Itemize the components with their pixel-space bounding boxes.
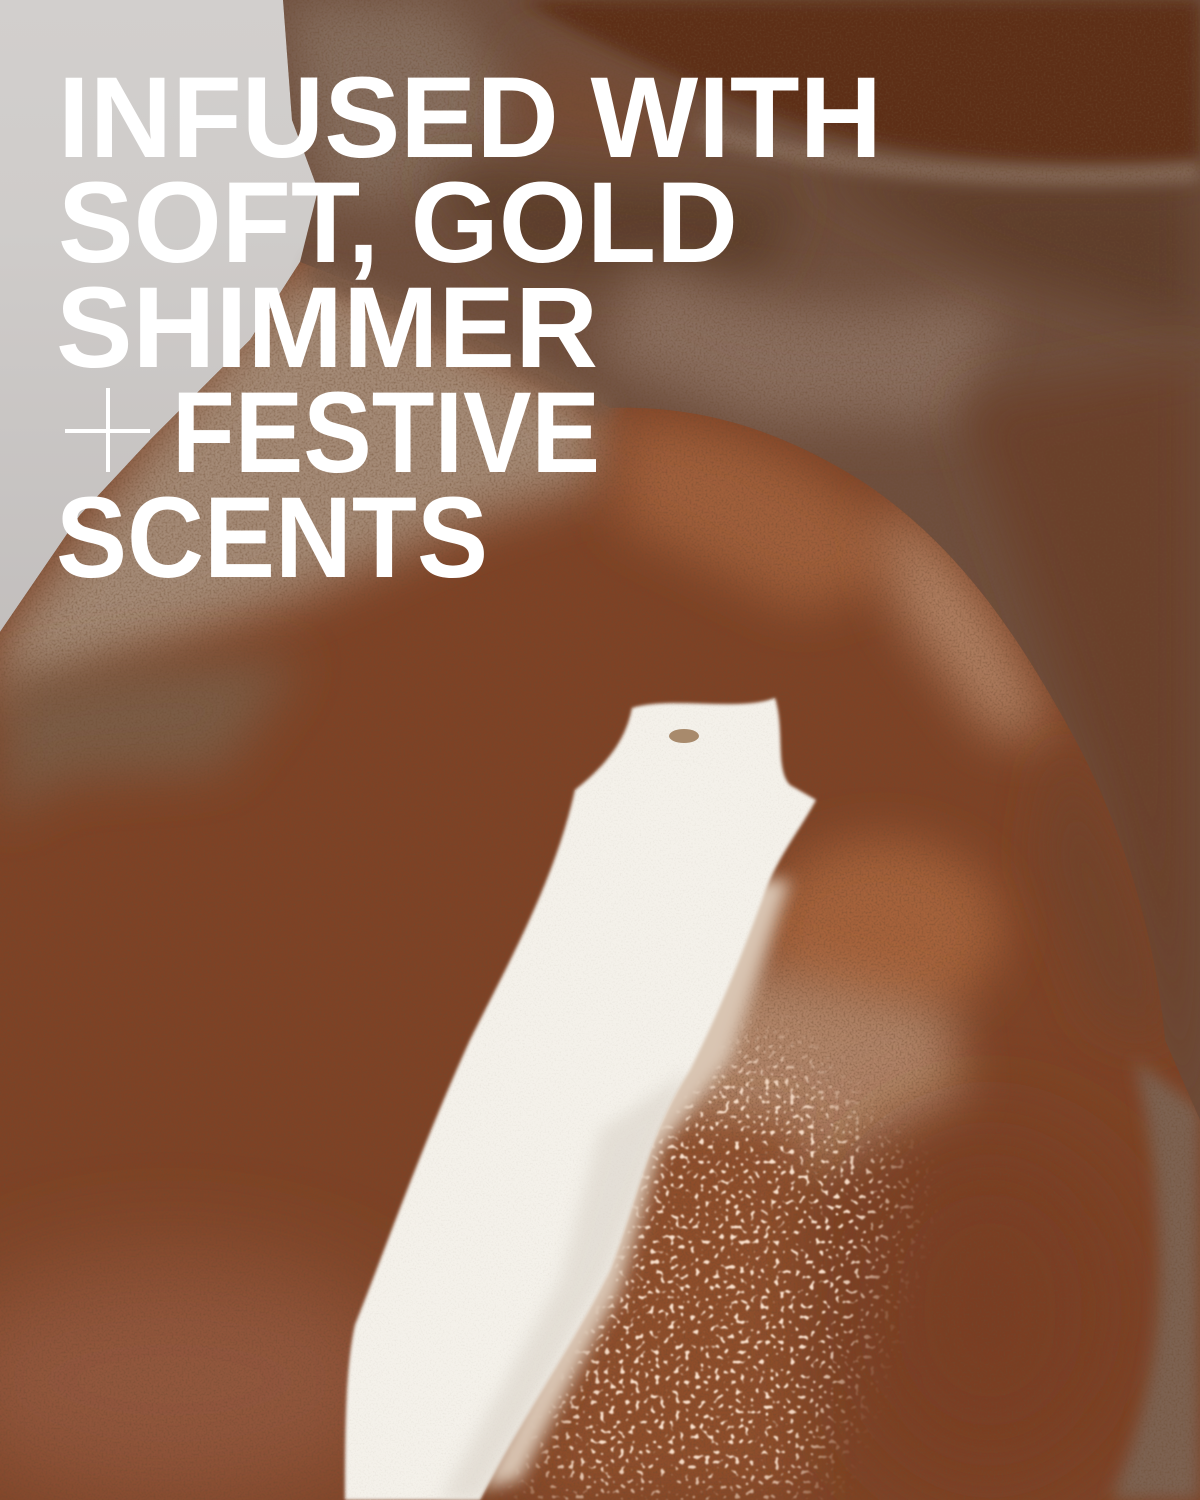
cream hole <box>669 729 699 743</box>
neck <box>0 0 1200 1120</box>
warm zone beside cream <box>760 840 1000 1020</box>
headline: SCENTS <box>56 474 488 602</box>
chin <box>520 0 1200 164</box>
headline: SOFT, GOLD <box>58 159 738 287</box>
warm highlight on shoulder cap <box>620 420 920 610</box>
headline: FESTIVE <box>172 369 600 497</box>
lower left arm <box>0 1260 410 1500</box>
headline: SHIMMER <box>56 264 598 392</box>
neck to shoulder fold <box>310 270 610 410</box>
taupe upper-left trapezius <box>0 262 600 710</box>
gold shimmer band <box>520 1120 800 1500</box>
icon: plus sign <box>65 388 150 472</box>
cream swatch <box>342 696 818 1500</box>
cream sugar texture <box>345 698 815 1500</box>
gold shimmer sparkle <box>508 1018 930 1500</box>
headline: INFUSED WITH <box>58 54 882 182</box>
lower arm <box>836 1084 952 1166</box>
right rim shade <box>1056 809 1146 1008</box>
pale sheen beside cream <box>650 960 960 1170</box>
headline <box>56 54 882 602</box>
